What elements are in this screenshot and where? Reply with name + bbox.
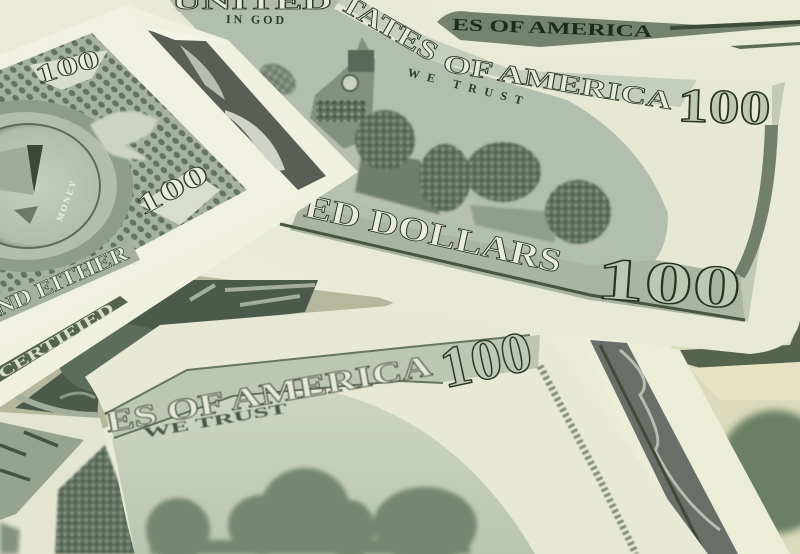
text: 100: 100 (434, 318, 538, 401)
trees and hall (330, 110, 611, 252)
seal inner disc (0, 124, 100, 248)
green field (112, 392, 535, 554)
right border line (540, 366, 636, 554)
dark leaf band (145, 30, 326, 190)
bill: bottom left corner fragment (0, 412, 145, 554)
upper text band (333, 0, 697, 107)
bill: right vertical strip (580, 335, 790, 554)
ornament scroll (90, 111, 158, 160)
corner box bottom (140, 170, 220, 225)
text: of america: OF AMERICA (441, 50, 674, 115)
print area (170, 0, 785, 322)
strip with lettering (0, 296, 128, 382)
corner box top (30, 50, 108, 90)
trees (146, 468, 477, 554)
text: hundred dollars: ED DOLLARS (301, 189, 565, 281)
text: we trust: WE TRUST (406, 65, 524, 107)
text: in god: IN GOD (226, 12, 285, 27)
green oval field (178, 8, 668, 268)
bill: top right fold (425, 0, 800, 66)
text: 100 bottom right: 100 (594, 245, 743, 321)
text: corner 100 top: 100 (32, 44, 103, 90)
text: money: MONEY (54, 179, 78, 223)
bill: bottom center note (85, 305, 708, 554)
right border band (738, 82, 785, 322)
bill: second left note underneath (0, 5, 358, 407)
bottom text strip (0, 240, 140, 322)
bill: upper left note with pyramid seal (0, 6, 301, 352)
seal outer ring (0, 100, 133, 272)
text: we trust: WE TRUST (142, 401, 288, 442)
bill: main 100 dollar note (130, 0, 800, 354)
text: corner 100 bottom: 100 (131, 158, 214, 222)
bottom border band (290, 205, 745, 322)
left sprig (254, 57, 302, 101)
text: 100 top right: 100 (677, 79, 771, 135)
light text band (105, 335, 540, 438)
pyramid (0, 145, 33, 195)
text: of america: ES OF AMERICA (103, 349, 435, 439)
bill: right lower note with tree (670, 320, 800, 554)
text: top fold lettering: ES OF AMERICA (452, 15, 653, 41)
Independence Hall tower (310, 37, 375, 150)
flap (138, 26, 232, 42)
bill: lower left under-layer with seal (0, 275, 400, 430)
